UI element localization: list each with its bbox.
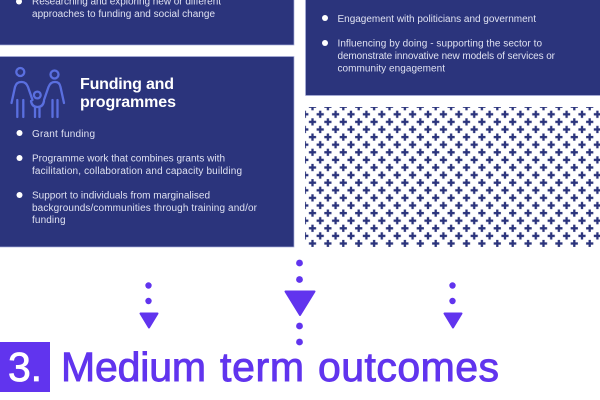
decorative cross pattern panel xyxy=(305,107,600,247)
arrow: right xyxy=(444,282,462,328)
text: programme work: Programme work that combines grants with xyxy=(32,154,225,164)
bullet: programme work xyxy=(16,155,22,161)
arrow: left xyxy=(140,282,158,328)
heading: funding and programmes: Funding and xyxy=(80,76,174,93)
section title: outcomes xyxy=(318,344,499,390)
text: support to individuals: funding xyxy=(32,215,66,226)
bullet: research xyxy=(16,0,22,4)
text: programme work: facilitation, collaboration and capacity building xyxy=(32,166,242,177)
text: influencing by doing: demonstrate innovative new models of services or xyxy=(338,51,556,62)
panel: funding and programmes xyxy=(0,56,294,247)
section number badge xyxy=(0,342,50,392)
panel: influencing (top right) xyxy=(306,0,600,96)
section number badge: 3. xyxy=(8,344,42,390)
section title: Medium xyxy=(61,344,206,390)
text: grant funding: Grant funding xyxy=(32,129,95,140)
bullet: support to individuals xyxy=(16,192,22,198)
bullet: influencing by doing xyxy=(322,40,328,46)
panel: research (top left) xyxy=(0,0,294,45)
icon: family xyxy=(12,68,64,117)
text: engagement: Engagement with politicians and government xyxy=(338,14,536,25)
text: support to individuals: Support to individuals from marginalised xyxy=(32,190,210,202)
text: support to individuals: backgrounds/communities through training and/or xyxy=(32,203,258,214)
text: influencing by doing: Influencing by doing - supporting the sector to xyxy=(338,38,542,50)
arrow: centre xyxy=(286,260,314,345)
bullet: grant funding xyxy=(16,130,22,136)
text: influencing by doing: community engagement xyxy=(338,64,445,74)
section title: term xyxy=(220,344,304,390)
text: research bullet: approaches to funding and social change xyxy=(32,9,215,20)
heading: funding and programmes: programmes xyxy=(80,94,176,111)
bullet: engagement xyxy=(322,15,328,21)
